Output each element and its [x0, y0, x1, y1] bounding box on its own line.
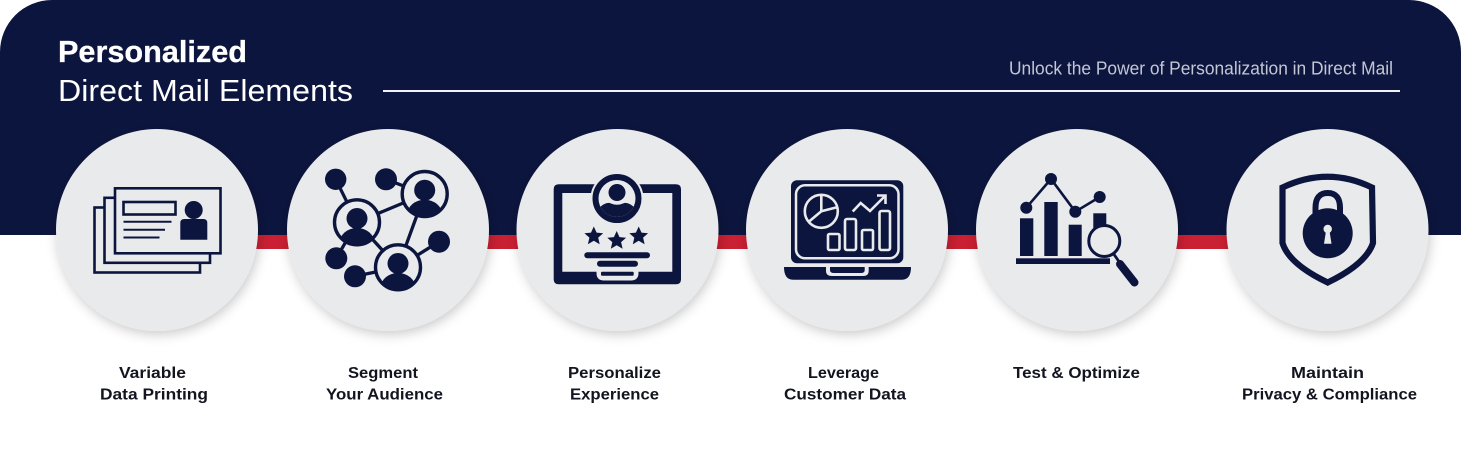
- label: leverage customer data: Customer Data: [784, 386, 906, 404]
- header panel: [0, 0, 1461, 235]
- icon: audience network: [325, 168, 450, 303]
- circle 1: [56, 129, 258, 331]
- title: Direct Mail Elements: [58, 73, 353, 108]
- icon: shield with padlock: [1282, 177, 1373, 282]
- step 5: test and optimize: [976, 129, 1178, 331]
- label: variable data printing: [100, 365, 208, 404]
- circle 4: [746, 129, 948, 331]
- label: variable data printing: Data Printing: [100, 386, 208, 404]
- label: personalize experience: Personalize: [568, 365, 661, 382]
- label: variable data printing: Variable: [119, 365, 186, 382]
- label: maintain privacy and compliance: Maintain: [1291, 365, 1364, 382]
- tagline: Unlock the Power of Personalization in Direct Mail: [1009, 58, 1393, 78]
- step 1: variable data printing: [56, 129, 258, 331]
- step 4: leverage customer data: [746, 129, 948, 331]
- label: personalize experience: Experience: [570, 386, 659, 404]
- label: maintain privacy and compliance: [1242, 365, 1417, 404]
- label: segment your audience: [326, 365, 443, 404]
- label: segment your audience: Your Audience: [326, 386, 443, 404]
- icon: monitor with profile and stars: [554, 173, 681, 284]
- circle 3: [516, 129, 718, 331]
- icon: stacked cards: [94, 188, 220, 272]
- label: maintain privacy and compliance: Privacy & Compliance: [1242, 386, 1417, 404]
- label: personalize experience: [568, 365, 661, 404]
- step 3: personalize experience: [516, 129, 718, 331]
- label: segment your audience: Segment: [348, 365, 419, 382]
- red connector band: [250, 235, 1235, 249]
- circle 5: [976, 129, 1178, 331]
- circle 6: [1226, 129, 1428, 331]
- icon: chart with magnifier: [1016, 173, 1134, 282]
- step 2: segment your audience: [287, 129, 489, 331]
- label: test and optimize: Test & Optimize: [1013, 365, 1140, 382]
- label: leverage customer data: [784, 365, 906, 404]
- title: [58, 34, 353, 108]
- circle 2: [287, 129, 489, 331]
- label: leverage customer data: Leverage: [808, 365, 879, 382]
- icon: laptop dashboard: [784, 180, 911, 280]
- title: Personalized: [58, 34, 247, 69]
- step 6: maintain privacy and compliance: [1226, 129, 1428, 331]
